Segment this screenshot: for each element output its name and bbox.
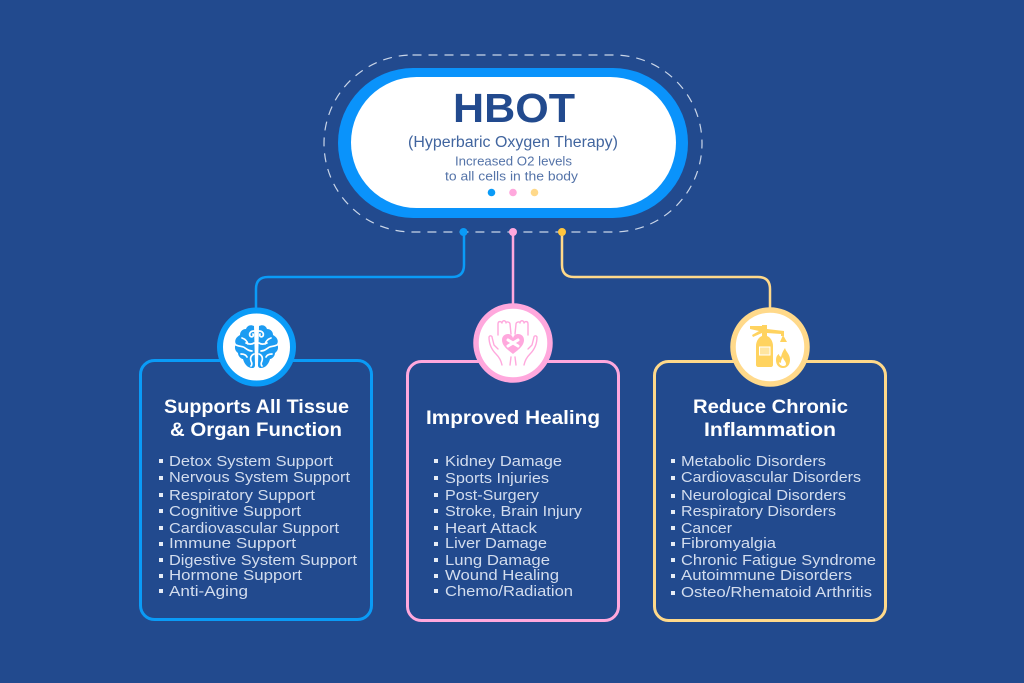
bullet list: Lung Damage [445, 552, 550, 569]
connector nodes [460, 228, 566, 236]
bullet list: Anti-Aging [169, 583, 248, 600]
bullet list: Autoimmune Disorders [681, 567, 852, 584]
icon: fire extinguisher [750, 325, 790, 368]
bullet list: Sports Injuries [445, 470, 549, 487]
card border [140, 360, 372, 620]
bullet list: Immune Support [169, 535, 297, 552]
bullet list: Osteo/Rhematoid Arthritis [681, 584, 872, 601]
bullet list: Detox System Support [169, 453, 334, 470]
bullet list: Liver Damage [445, 535, 547, 552]
bullet list [434, 453, 583, 600]
card border [654, 362, 886, 620]
dashed outer outline [324, 55, 702, 232]
bullet list: Cardiovascular Disorders [681, 469, 861, 486]
heading: Reduce Chronic [693, 396, 848, 418]
icon: hands holding heart [489, 321, 537, 365]
connector: yellow line [562, 232, 770, 312]
heading: Supports All Tissue [164, 396, 349, 418]
bullet list: Hormone Support [169, 567, 303, 584]
panel: tissue and organ function [140, 310, 372, 620]
title: HBOT [453, 85, 575, 131]
panel: improved healing [408, 306, 618, 620]
bullet list: Neurological Disorders [681, 487, 846, 504]
description: Increased O2 levels [455, 154, 572, 168]
connector: pink line [512, 232, 514, 310]
heading: Improved Healing [426, 407, 600, 429]
bullet list: Cardiovascular Support [169, 520, 340, 537]
connector: blue line [256, 232, 464, 312]
description: to all cells in the body [445, 168, 579, 184]
bullet list: Chemo/Radiation [445, 583, 573, 600]
subtitle: (Hyperbaric Oxygen Therapy) [408, 134, 618, 151]
bullet list: Post-Surgery [445, 487, 540, 504]
bullet list [671, 453, 876, 601]
bullet list: Digestive System Support [169, 552, 358, 569]
bullet list: Metabolic Disorders [681, 453, 826, 470]
bullet list: Stroke, Brain Injury [445, 503, 583, 520]
icon: brain [235, 325, 278, 368]
bullet list: Chronic Fatigue Syndrome [681, 552, 876, 569]
pill outer blue shape [338, 68, 688, 218]
bullet list: Respiratory Disorders [681, 503, 836, 520]
header: HBOT pill [324, 55, 702, 232]
three colored dots [488, 189, 538, 196]
bullet list [159, 453, 358, 600]
heading: Inflammation [704, 419, 836, 441]
heading: & Organ Function [170, 419, 342, 441]
bullet list: Cancer [681, 520, 732, 537]
bullet list: Wound Healing [445, 567, 559, 584]
bullet list: Fibromyalgia [681, 535, 777, 552]
bullet list: Heart Attack [445, 520, 538, 537]
bullet list: Respiratory Support [169, 487, 316, 504]
badge: fire extinguisher [733, 310, 807, 384]
description [445, 154, 579, 184]
badge: brain [220, 310, 293, 384]
panel: reduce chronic inflammation [654, 310, 886, 620]
heading [164, 396, 349, 441]
bullet list: Kidney Damage [445, 453, 562, 470]
card border [408, 362, 618, 620]
pill inner white shape [351, 77, 676, 208]
bullet list: Cognitive Support [169, 503, 302, 520]
badge: hands and heart [476, 306, 550, 380]
heading [693, 396, 848, 441]
bullet list: Nervous System Support [169, 469, 351, 486]
